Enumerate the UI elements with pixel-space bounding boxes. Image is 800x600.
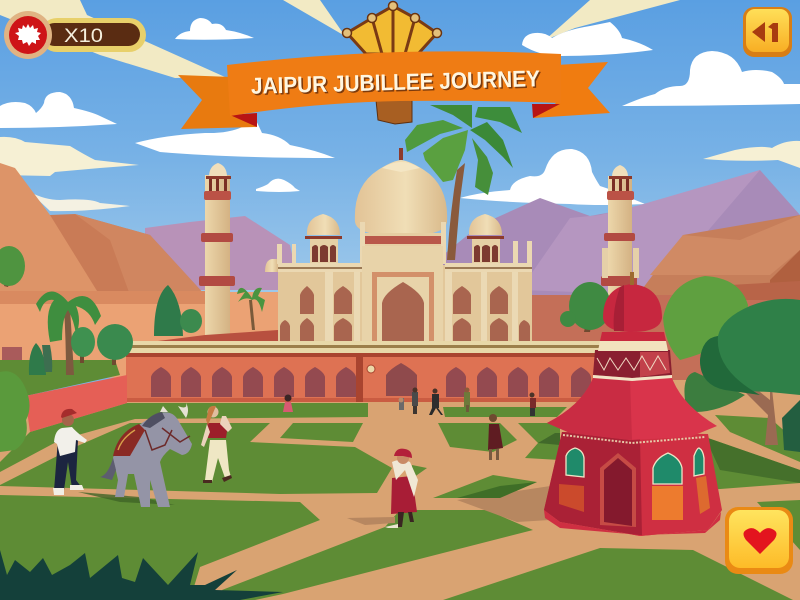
main dome [355,148,447,236]
rewind button [743,7,792,57]
small left palm behind wall [237,288,265,330]
orange hills right [640,215,800,300]
facade [278,265,532,345]
cypress bushes [154,285,183,336]
red terrace behind courtyard [150,330,278,342]
donkey shadow [78,492,175,505]
title: JAIPUR JUBILLEE JOURNEY [251,65,540,99]
white clouds [0,18,800,221]
fort walls background [0,281,800,410]
right background trees [560,276,800,452]
foreground foliage [0,550,283,600]
central palm tree [405,105,522,260]
facade columns [325,272,518,345]
saddle blanket [113,424,145,456]
distant visitors [283,388,536,460]
couple at gate [412,388,418,414]
red pavilion [544,272,722,536]
red medallion [4,11,52,59]
left trees [0,246,202,452]
sky background [0,0,800,320]
roof pinnacles [277,222,532,265]
left minaret [199,163,235,335]
lawns [0,360,800,600]
title ribbon [178,51,610,129]
person in maroon robe [488,414,503,460]
clouds [0,0,800,221]
base ring [544,510,721,536]
left garden wall [25,375,127,432]
ground [0,380,800,600]
cream sky streaks [0,0,680,78]
pavilion windows [566,448,704,484]
courtyard gate [386,363,417,396]
roof [547,378,717,440]
small trees behind pavilion [560,282,611,332]
cream tinted clouds [0,137,800,176]
courtyard arches [151,367,591,397]
title shadow: JAIPUR JUBILLEE JOURNEY [252,67,542,100]
heart button [725,507,793,574]
dome drum [363,233,442,247]
counter value: X10 [64,26,103,47]
badge counter [4,11,146,59]
ribbon folds [230,113,257,127]
ornate band [593,350,672,381]
purple mountains [145,170,800,295]
crown fringe [376,100,412,124]
door [600,453,636,527]
ribbon face [227,51,561,116]
courtyard wall [118,341,600,402]
central portal [362,246,443,345]
donkey bridle [145,428,190,450]
ground shadows [347,433,800,525]
woman in red top [201,406,232,483]
pavilion dome [603,272,662,332]
donkey mane [142,412,165,428]
side domes [265,214,502,272]
roof trim [563,435,705,443]
right minaret [601,165,639,301]
crown emblem [342,2,442,54]
right tail [533,62,610,118]
big dark green tree [700,299,800,395]
kiosk columns [305,236,504,264]
round trees [97,324,133,365]
dark round bush [684,372,745,412]
grey donkey with saddle [78,403,192,507]
orange panels [652,486,683,520]
donkey body [113,412,192,507]
orange hills left [0,163,205,320]
tree far left [0,246,25,287]
counter bar [40,18,146,52]
hedge [0,371,30,452]
facade windows [280,286,530,342]
girl near wall [283,394,293,412]
neck [600,332,666,341]
left palm [36,291,101,375]
man in red turban [53,409,87,495]
pavilion body [544,432,722,536]
taj palace [265,148,532,345]
left tail [178,75,257,129]
light green tree [663,276,748,360]
woman in red dress [385,449,418,528]
big tree trunk [745,370,778,445]
